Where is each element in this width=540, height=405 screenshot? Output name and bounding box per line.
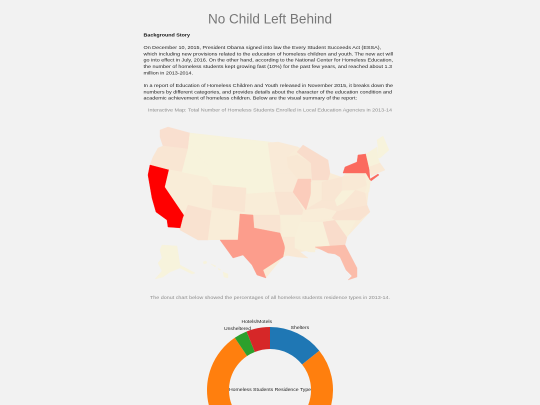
text block: second paragraph: numbers by different categories, and provides details about the character of the education condition and xyxy=(144,89,392,95)
heading: background story: Background Story xyxy=(144,33,190,39)
Hawaii xyxy=(203,261,228,278)
donut caption: The donut chart below showed the percentages of all homeless students residence types in 2013-14. xyxy=(150,295,390,301)
label: shelters: Shelters xyxy=(291,325,310,331)
Alaska xyxy=(155,245,195,279)
text block: first paragraph: which including new provisions related to the education of homeless children and youth. The new act will xyxy=(144,51,393,57)
text block: first paragraph: On December 10, 2015, President Obama signed into law the Every Student Succeeds Act (ESSA), xyxy=(144,45,381,51)
text block: second paragraph: academic achievement of homeless children. Below are the visual summary of the report: xyxy=(144,96,357,102)
silhouette underlay closes gaps between states xyxy=(150,133,370,278)
label: hotels/motels: Hotels/Motels xyxy=(242,319,273,325)
segment: hotels/motels xyxy=(247,327,270,352)
choropleth map of US states xyxy=(148,127,389,280)
text block: first paragraph: million in 2013-2014. xyxy=(144,70,193,76)
text block: first paragraph: the number of homeless students kept growing fast (10%) for the past few years, and reached about 1.3 xyxy=(144,64,392,70)
text block: second paragraph: In a report of Education of Homeless Children and Youth released in November 2015, it breaks down the xyxy=(144,83,393,89)
text block: second paragraph xyxy=(144,83,393,102)
text block: first paragraph: go into effect in July, 2016. On the other hand, according to the National Center for Homeless Education, xyxy=(144,58,393,64)
map caption: Interactive Map: Total Number of Homeless Students Enrolled in Local Education Agencies in 2013-14 xyxy=(148,108,392,114)
label: unsheltered: Unsheltered xyxy=(224,326,251,332)
segment: unsheltered xyxy=(235,332,255,356)
title: No Child Left Behind xyxy=(208,11,332,26)
segment: doubled-up xyxy=(207,338,333,405)
text block: first paragraph xyxy=(144,45,393,76)
donut center title: Homeless Students Residence Type xyxy=(229,387,311,393)
donut chart xyxy=(207,319,333,405)
segment: shelters xyxy=(270,327,319,364)
